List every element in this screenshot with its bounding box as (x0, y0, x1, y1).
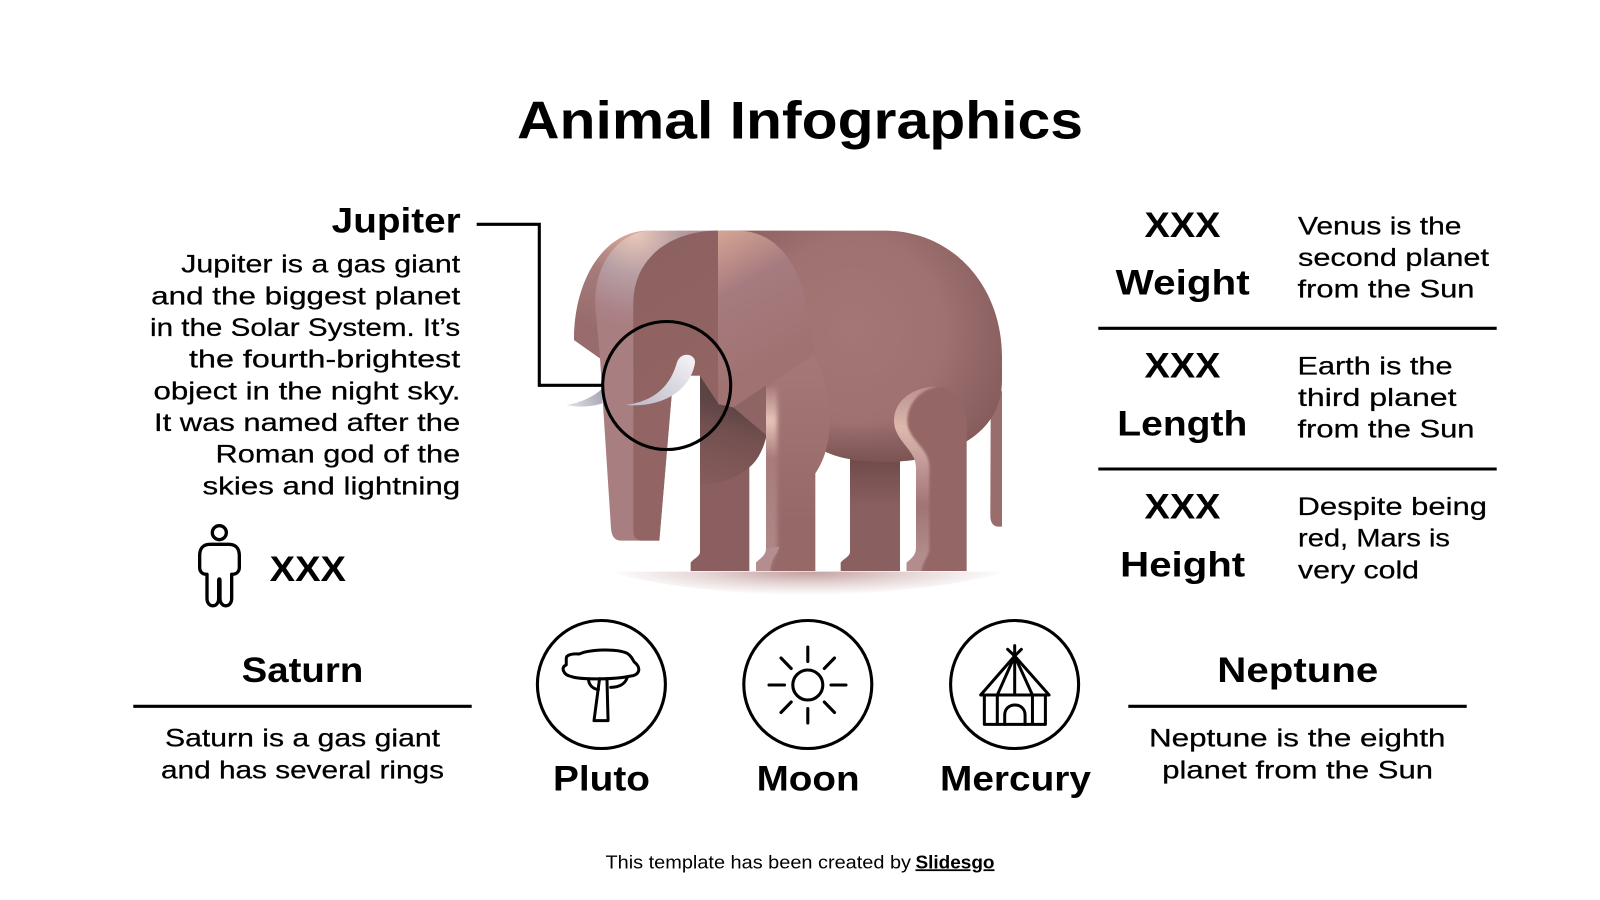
ground shadow (610, 572, 1007, 595)
text block: Jupiter description: and the biggest planet (151, 282, 460, 310)
lower ear shadow wedge (718, 370, 787, 435)
Length description: Earth is the (1298, 352, 1452, 380)
Pluto label: Pluto (553, 760, 650, 799)
Saturn description: Saturn is a gas giant (165, 725, 440, 753)
Length description (1298, 352, 1474, 444)
Length description: from the Sun (1298, 416, 1474, 444)
icon: tree (537, 620, 665, 748)
Height label: Height (1120, 546, 1246, 585)
Saturn description (161, 725, 444, 784)
Neptune description: planet from the Sun (1162, 756, 1433, 784)
icon: hut (951, 620, 1079, 748)
Weight label: Weight (1116, 263, 1250, 302)
Weight description: second planet (1298, 244, 1489, 272)
Neptune heading: Neptune (1217, 651, 1378, 690)
Saturn heading: Saturn (242, 651, 363, 690)
panel: Mercury (940, 620, 1092, 799)
Moon label: Moon (757, 760, 860, 799)
illustration: elephant (566, 231, 1007, 595)
Height value: XXX (1144, 488, 1221, 527)
icon: sun (744, 620, 872, 748)
Saturn description: and has several rings (161, 756, 444, 784)
arrow: Jupiter callout leader line (477, 224, 602, 385)
panel: Pluto (537, 620, 665, 799)
callout circle on tusk (603, 322, 731, 450)
Weight description: Venus is the (1298, 212, 1462, 240)
footer credit: This template has been created by (606, 852, 911, 872)
text block: Jupiter description: object in the night sky. (154, 377, 460, 405)
icon: human height scale (200, 526, 239, 606)
panel: Saturn (133, 651, 472, 784)
Length value: XXX (1144, 347, 1221, 386)
panel: Length (1117, 347, 1474, 444)
panel: Neptune (1128, 651, 1467, 784)
near rear leg (894, 387, 967, 571)
panel: Jupiter description (150, 202, 461, 500)
Length description: third planet (1298, 384, 1457, 412)
text block: Jupiter description: in the Solar System. It’s (150, 314, 460, 342)
Neptune description: Neptune is the eighth (1149, 725, 1446, 753)
ear flap side (574, 231, 648, 358)
Weight description: from the Sun (1298, 276, 1474, 304)
Length label: Length (1117, 405, 1247, 444)
text block: Jupiter description: skies and lightning (202, 472, 460, 500)
human scale value: XXX (270, 550, 347, 589)
Weight value: XXX (1144, 206, 1221, 245)
body (720, 231, 1002, 462)
Mercury label: Mercury (940, 760, 1092, 799)
Height description: very cold (1298, 556, 1419, 584)
text block: Jupiter description: It was named after the (154, 409, 460, 437)
front leg highlight (753, 387, 777, 573)
panel: Moon (744, 620, 872, 799)
Height description: Despite being (1298, 493, 1487, 521)
tail (990, 390, 1002, 527)
text block: Jupiter description: Jupiter is a gas giant (181, 251, 460, 279)
tusks (566, 355, 695, 407)
head and trunk (574, 231, 718, 541)
panel: Weight (1116, 206, 1489, 304)
front foot highlight (756, 547, 779, 571)
panel: Height (1120, 488, 1487, 585)
Height description: red, Mars is (1298, 525, 1450, 553)
Weight description (1298, 212, 1489, 304)
head shaded face (633, 231, 718, 541)
text block: Jupiter description: the fourth-brightest (189, 346, 460, 374)
heading: Jupiter: Jupiter (332, 202, 461, 241)
title: Animal Infographics (517, 92, 1083, 150)
near front leg (756, 355, 830, 571)
footer credit: Slidesgo (916, 852, 995, 872)
infographic canvas (133, 100, 1497, 872)
text block: Jupiter description: Roman god of the (216, 441, 460, 469)
ear (718, 231, 815, 407)
Height description (1298, 493, 1487, 584)
rear leg highlight (894, 386, 936, 571)
far legs (691, 370, 900, 571)
text block: Jupiter description (150, 251, 460, 500)
Neptune description (1149, 725, 1446, 784)
